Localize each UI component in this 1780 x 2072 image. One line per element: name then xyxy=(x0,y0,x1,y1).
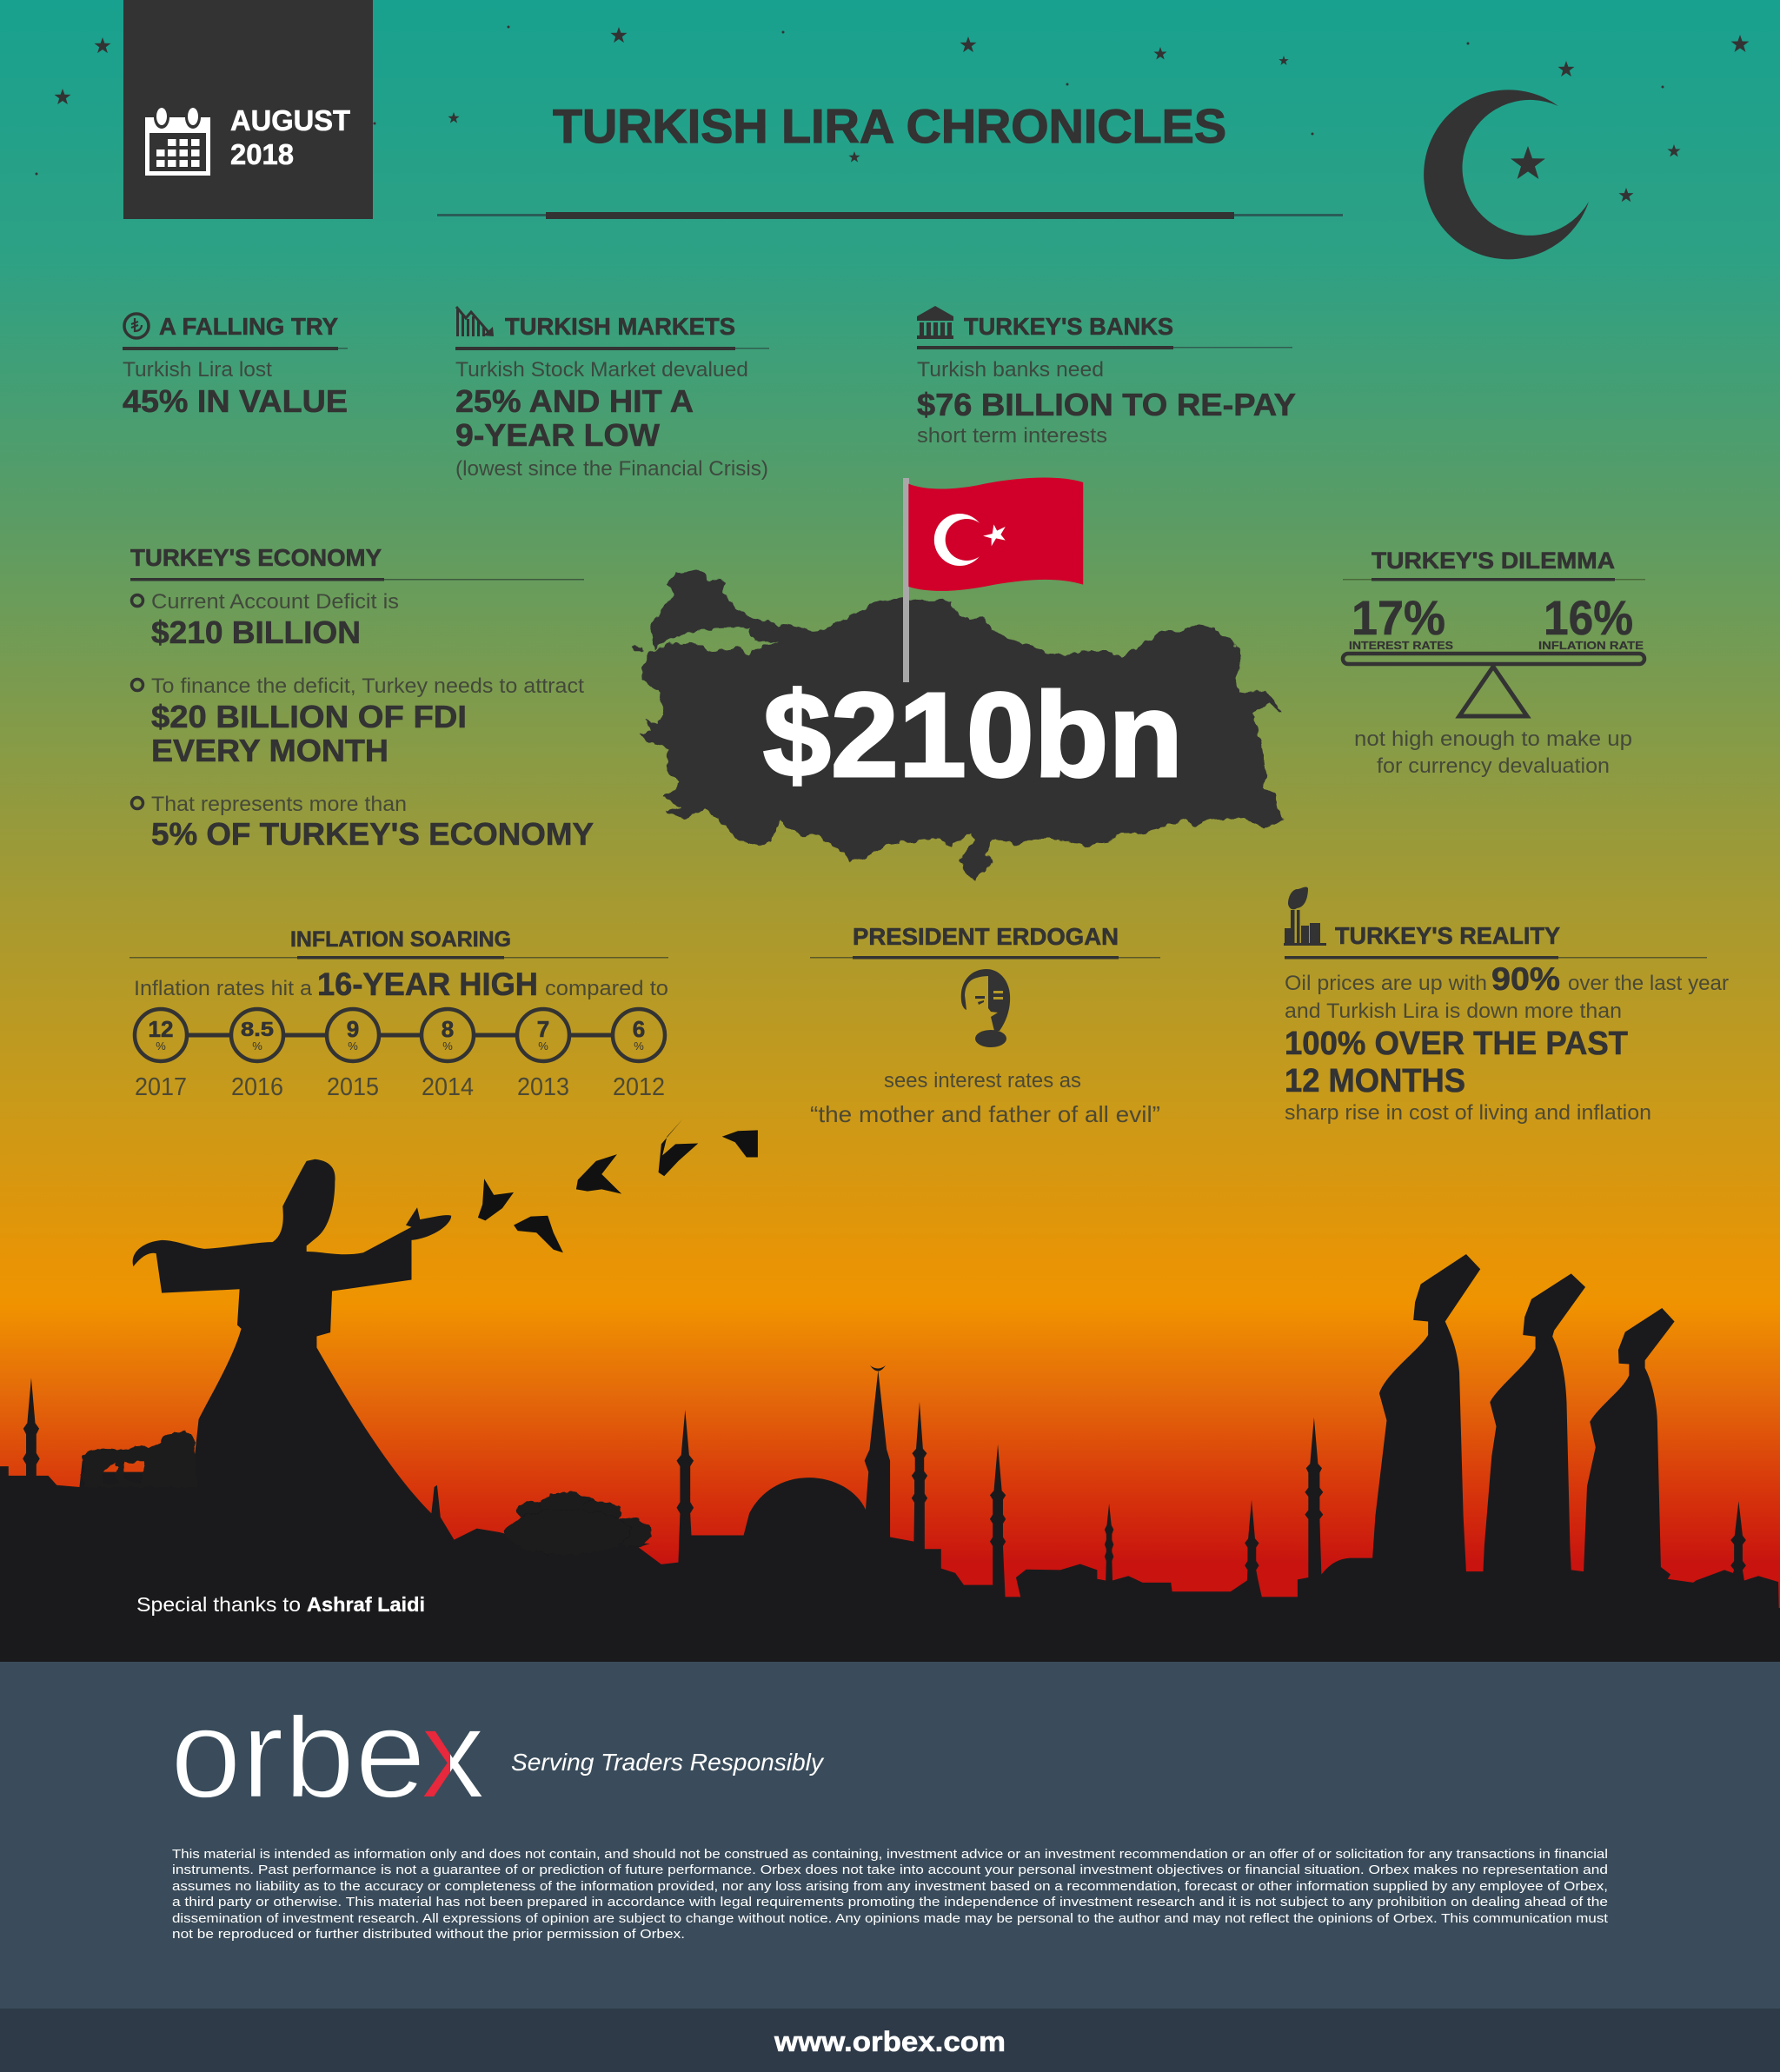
date text: 2018 xyxy=(230,138,294,170)
panel: Turkish markets: Turkish Stock Market devalued xyxy=(455,358,748,382)
panel: Turkey's dilemma: INFLATION RATE xyxy=(1538,639,1644,652)
panel: Turkey's reality: 100% OVER THE PAST xyxy=(1285,1026,1628,1062)
panel: a falling TRY: 45% IN VALUE xyxy=(123,383,348,419)
bullet: share of economy: That represents more than xyxy=(151,793,407,816)
timeline: 2016 xyxy=(231,1073,283,1101)
timeline: 12 xyxy=(149,1016,173,1042)
disclaimer: a third party or otherwise. This material has not been prepared in accordance with legal requirements promoting the independence of investment research and it is not subject to any prohibition on dealing ahead of the xyxy=(172,1895,1608,1909)
heading: TURKEY'S DILEMMA xyxy=(1372,548,1615,574)
website bar: www.orbex.com xyxy=(774,2026,1006,2057)
panel: President Erdogan: sees interest rates as xyxy=(884,1069,1081,1092)
bullet: deficit xyxy=(132,590,399,650)
heading: INFLATION SOARING xyxy=(290,927,511,952)
heading: A FALLING TRY xyxy=(159,313,338,340)
disclaimer: not be reproduced or further distributed without the prior permission of Orbex. xyxy=(172,1927,685,1942)
panel: Turkey's banks xyxy=(917,306,1296,448)
flag pole xyxy=(903,478,909,682)
disclaimer: dissemination of investment research. All expressions of opinion are subject to change without notice. Any opinions made may be personal to the author and may not reflect the opinions of Orbex. This communication must xyxy=(172,1911,1609,1926)
sentence: Inflation rates hit a xyxy=(134,977,313,1000)
Turkish flag xyxy=(908,477,1083,591)
right skyline and statues xyxy=(890,1254,1780,1666)
panel: Turkey's reality: Oil prices are up with xyxy=(1285,972,1487,995)
timeline: 2013 xyxy=(517,1073,569,1101)
disclaimer xyxy=(172,1847,1609,1942)
timeline: 9 xyxy=(347,1016,359,1042)
heading: TURKEY'S ECONOMY xyxy=(130,544,382,571)
birds xyxy=(478,1119,758,1252)
date box xyxy=(123,0,373,219)
disclaimer: This material is intended as information only and does not contain, and should not be construed as containing, investment advice or an investment recommendation or an offer of or solicitation for any transactions in financial xyxy=(172,1847,1608,1862)
panel: Turkey's reality: 90% xyxy=(1491,961,1560,997)
orbex logo: orbe xyxy=(170,1683,426,1824)
icon: balance scale xyxy=(1343,654,1644,716)
special thanks xyxy=(136,1593,425,1616)
tagline: Serving Traders Responsibly xyxy=(511,1749,825,1776)
bullet: deficit: Current Account Deficit is xyxy=(151,590,399,614)
trees left and centre xyxy=(83,1431,652,1555)
panel: Turkey's reality xyxy=(1284,887,1729,1125)
panel: a falling TRY xyxy=(123,313,348,419)
timeline xyxy=(135,1009,665,1101)
icon: Erdogan portrait question mark xyxy=(961,969,1010,1047)
timeline: 2014 xyxy=(422,1073,474,1101)
bullet: FDI: EVERY MONTH xyxy=(151,733,389,768)
panel: Turkey's dilemma: not high enough to make up xyxy=(1354,727,1632,751)
big number: $210bn xyxy=(763,668,1183,802)
map of Turkey xyxy=(633,570,1284,880)
panel: Turkey's dilemma: 16% xyxy=(1544,590,1633,645)
panel: Turkish markets xyxy=(455,307,769,481)
panel: Turkey's economy xyxy=(130,544,594,852)
icon: lira coin xyxy=(124,314,149,338)
timeline: % xyxy=(634,1039,644,1053)
panel: President Erdogan xyxy=(810,923,1160,1127)
timeline: % xyxy=(348,1039,358,1053)
title rule xyxy=(437,212,1343,219)
dervish and left skyline xyxy=(0,1159,890,1660)
panel: Turkish markets: 25% AND HIT A xyxy=(455,383,694,419)
crescent finial xyxy=(870,1365,886,1371)
heading: PRESIDENT ERDOGAN xyxy=(853,923,1119,950)
panel: Turkey's reality: over the last year xyxy=(1568,972,1729,995)
panel: Turkey's reality: 12 MONTHS xyxy=(1285,1063,1465,1099)
icon: crescent and star xyxy=(1424,90,1589,259)
bullet: share of economy xyxy=(132,793,594,852)
panel: Turkey's dilemma: for currency devaluation xyxy=(1377,754,1610,778)
panel: Turkey's dilemma: 17% xyxy=(1352,590,1445,645)
heading: TURKEY'S BANKS xyxy=(964,313,1173,340)
bullet: share of economy: 5% OF TURKEY'S ECONOMY xyxy=(151,816,594,852)
title: TURKISH LIRA CHRONICLES xyxy=(553,99,1226,153)
skyline with whirling dervish and birds xyxy=(0,1159,1780,1666)
disclaimer: instruments. Past performance is not a guarantee of or prediction of future performance. Orbex does not take into account your personal investment objectives or financial situation. Orbex makes no representation and xyxy=(172,1863,1608,1877)
stars xyxy=(35,26,1749,202)
disclaimer: assumes no liability as to the accuracy or completeness of the information provided, nor any loss arising from any investment based on a recommendation, forecast or other information supplied by any employee of Orbex, xyxy=(172,1879,1608,1894)
timeline: 8.5 xyxy=(241,1018,274,1040)
timeline: 2017 xyxy=(135,1073,187,1101)
icon: calendar xyxy=(145,106,210,176)
timeline: 6 xyxy=(633,1016,645,1042)
icon: falling market chart xyxy=(456,307,494,336)
bullet: FDI: $20 BILLION OF FDI xyxy=(151,699,467,734)
timeline: % xyxy=(538,1039,548,1053)
icon: factory xyxy=(1284,887,1326,946)
bullet: FDI: To finance the deficit, Turkey needs to attract xyxy=(151,674,584,698)
panel: President Erdogan: “the mother and father of all evil” xyxy=(810,1101,1160,1127)
panel: Turkish markets: 9-YEAR LOW xyxy=(455,417,660,453)
icon: bank building xyxy=(917,306,953,339)
panel: Turkey's reality: and Turkish Lira is down more than xyxy=(1285,999,1622,1023)
timeline: % xyxy=(442,1039,453,1053)
special thanks: Ashraf Laidi xyxy=(307,1593,425,1616)
panel: Turkey's dilemma xyxy=(1343,548,1645,778)
bullet: deficit: $210 BILLION xyxy=(151,614,361,650)
sentence: 16-YEAR HIGH xyxy=(317,966,538,1002)
heading: TURKISH MARKETS xyxy=(505,313,735,340)
timeline: 7 xyxy=(537,1016,549,1042)
panel: Turkey's dilemma: INTEREST RATES xyxy=(1349,639,1453,652)
panel: Turkey's banks: short term interests xyxy=(917,424,1107,448)
panel: Turkey's banks: $76 BILLION TO RE-PAY xyxy=(917,387,1296,422)
panel: Turkey's banks: Turkish banks need xyxy=(917,358,1104,382)
timeline: 8 xyxy=(442,1016,454,1042)
panel: inflation soaring xyxy=(130,927,668,1101)
panel: a falling TRY: Turkish Lira lost xyxy=(123,358,272,382)
timeline: % xyxy=(156,1039,166,1053)
panel: Turkish markets: (lowest since the Financial Crisis) xyxy=(455,457,768,481)
heading: TURKEY'S REALITY xyxy=(1335,922,1560,949)
panel: footer xyxy=(0,1662,1780,2009)
panel: Turkey's reality: sharp rise in cost of living and inflation xyxy=(1285,1101,1651,1125)
timeline: 2015 xyxy=(327,1073,379,1101)
timeline: % xyxy=(252,1039,262,1053)
special thanks: Special thanks to xyxy=(136,1593,301,1616)
website bar xyxy=(0,2009,1780,2072)
bullet: FDI xyxy=(132,674,584,768)
date text: AUGUST xyxy=(230,104,350,136)
sentence: compared to xyxy=(545,977,668,1000)
timeline: 2012 xyxy=(613,1073,665,1101)
orbex logo: x xyxy=(421,1683,485,1824)
date text xyxy=(230,104,350,170)
sentence xyxy=(134,966,668,1002)
